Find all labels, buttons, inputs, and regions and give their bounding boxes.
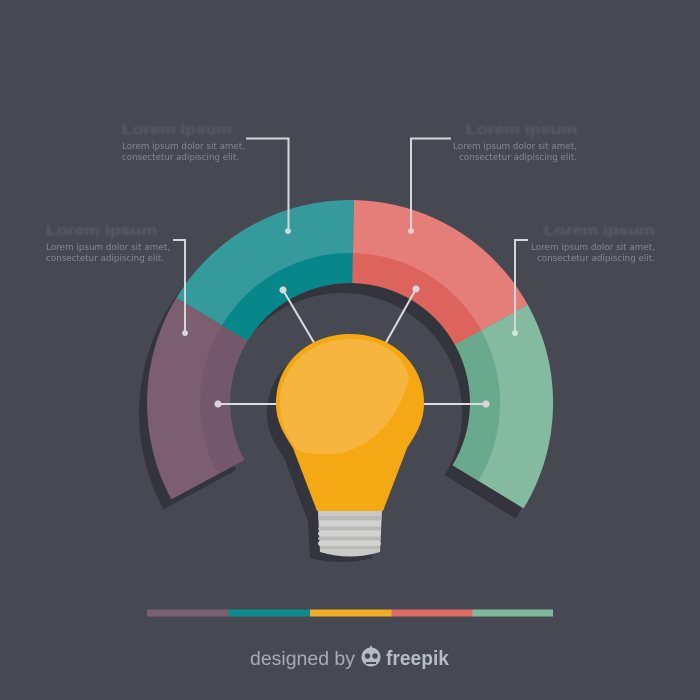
segment: red	[352, 200, 528, 345]
connector dots inner	[214, 285, 490, 408]
body text: Lorem ipsum dolor sit amet,	[531, 243, 655, 253]
arc shadow	[139, 210, 545, 518]
footer credit	[250, 645, 450, 670]
leader dot	[408, 228, 414, 234]
leader dot	[512, 330, 518, 336]
connector lines inner	[218, 289, 486, 404]
heading: Lorem ipsum	[122, 121, 232, 137]
freepik: freepik	[386, 648, 450, 670]
colour bar	[147, 610, 553, 616]
heading: Lorem ipsum	[46, 222, 157, 238]
body text: consectetur adipiscing elit.	[537, 254, 655, 264]
semicircular ring chart	[147, 200, 553, 508]
leader line	[515, 240, 528, 333]
body text: Lorem ipsum dolor sit amet,	[122, 142, 245, 152]
bulb highlight	[280, 339, 409, 454]
body text: consectetur adipiscing elit.	[46, 254, 164, 264]
callout: right	[512, 222, 655, 336]
icon: freepik logo	[362, 645, 380, 666]
bulb glass	[276, 334, 424, 511]
leader line	[411, 138, 451, 231]
heading: Lorem ipsum	[466, 121, 577, 137]
leader dot	[285, 228, 291, 234]
body text: Lorem ipsum dolor sit amet,	[46, 243, 170, 253]
light bulb	[276, 334, 424, 556]
callout: top left	[122, 121, 291, 234]
leader line	[173, 240, 185, 333]
leader line	[246, 138, 288, 231]
heading: Lorem ipsum	[544, 222, 655, 238]
body text: consectetur adipiscing elit.	[122, 153, 239, 163]
callout: top right	[408, 121, 577, 234]
segment: green	[453, 304, 553, 508]
body text: Lorem ipsum dolor sit amet,	[453, 142, 577, 152]
segment: teal	[176, 200, 354, 341]
designed by: designed by	[250, 649, 356, 670]
bulb shadow	[267, 344, 415, 562]
bulb screw base	[318, 511, 382, 556]
segment: purple	[147, 298, 247, 499]
body text: consectetur adipiscing elit.	[459, 153, 577, 163]
leader dot	[182, 330, 188, 336]
callout: left	[46, 222, 188, 336]
